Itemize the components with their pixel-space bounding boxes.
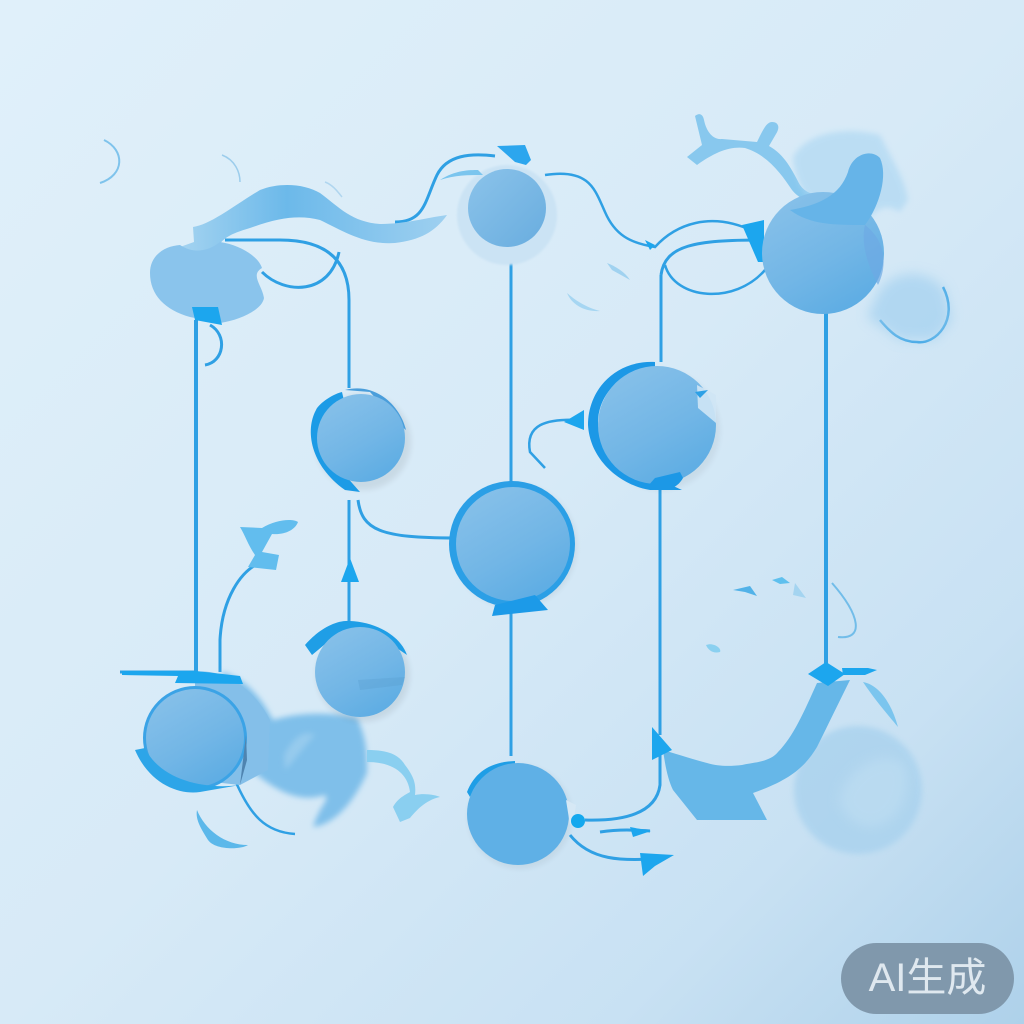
top left blob <box>150 242 264 323</box>
bottom left tail <box>367 750 440 822</box>
bottom right ribbon <box>663 680 850 820</box>
node: right middle <box>588 362 720 490</box>
nodes <box>122 153 884 869</box>
top left ribbon <box>180 185 447 254</box>
top left blob connector <box>192 307 222 325</box>
arrow heads <box>341 220 877 876</box>
AI badge <box>841 943 1014 1014</box>
node: bottom centre <box>467 761 585 869</box>
curved arrow head left <box>240 520 298 570</box>
node: top right <box>762 153 884 314</box>
bottom left blob <box>220 672 367 827</box>
node: top centre <box>468 169 546 247</box>
lower right soft circle <box>867 274 952 340</box>
node: bottom left <box>122 671 270 793</box>
y shaped ribbon top right <box>687 114 835 204</box>
soft shape behind top right node <box>793 131 908 225</box>
connector lines <box>100 140 949 860</box>
small fragments <box>197 810 248 848</box>
ribbons and soft shapes <box>150 114 952 854</box>
bottom right ghost circle <box>794 726 922 854</box>
AI badge: AI生成 <box>869 956 986 1000</box>
node: centre <box>449 481 577 616</box>
node: lower middle <box>305 621 410 722</box>
node: upper middle <box>311 388 411 492</box>
soft halo behind top node <box>457 165 557 265</box>
